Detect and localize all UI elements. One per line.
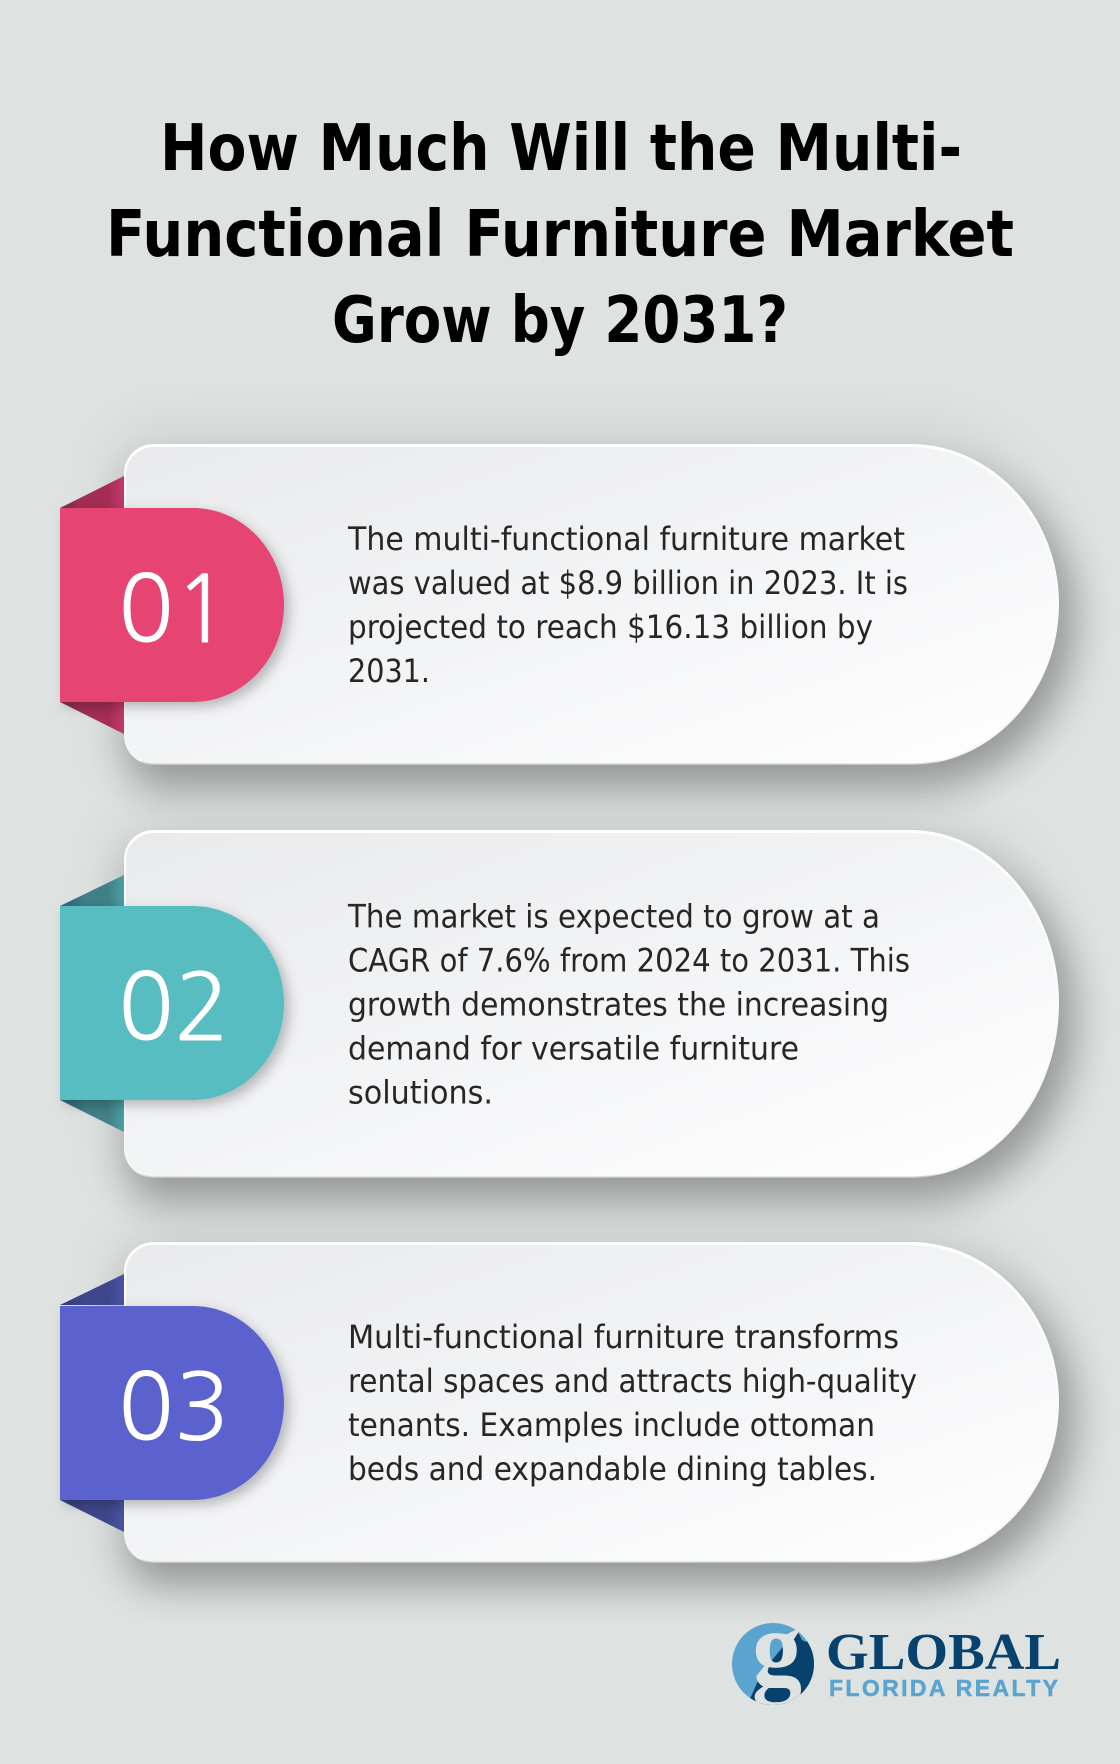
panel: card 01 [60, 430, 1074, 786]
card 03 text: rental spaces and attracts high-quality [348, 1362, 917, 1400]
title: Functional Furniture Market [106, 198, 1014, 272]
title: Grow by 2031? [332, 284, 788, 358]
card 01 text: was valued at $8.9 billion in 2023. It is [348, 564, 908, 602]
logo wordmark: GLOBAL [826, 1624, 1061, 1681]
card 02 text: demand for versatile furniture [348, 1030, 799, 1068]
card 01 text: 2031. [348, 652, 430, 690]
card 01 text: The multi-functional furniture market [347, 520, 905, 558]
card 02 text: CAGR of 7.6% from 2024 to 2031. This [348, 942, 910, 980]
panel: card 02 [60, 816, 1074, 1199]
card 02 text: growth demonstrates the increasing [348, 986, 889, 1024]
number 01: 01 [118, 563, 230, 656]
card 02 folds [60, 875, 124, 1132]
card 01 text: projected to reach $16.13 billion by [348, 608, 873, 646]
number 03: 03 [118, 1361, 230, 1454]
card 03 text: beds and expandable dining tables. [348, 1450, 877, 1488]
card 03 text [348, 1318, 917, 1488]
number 02: 02 [118, 961, 230, 1054]
card 03 text: tenants. Examples include ottoman [348, 1406, 875, 1444]
card 01 shadow [116, 430, 1074, 786]
title: How Much Will the Multi- [160, 112, 962, 186]
card 03 number badge [60, 1306, 284, 1500]
card 01 number badge [60, 508, 284, 702]
logo [732, 1623, 1059, 1705]
icon: logo circle: g [752, 1589, 802, 1708]
card 02 text: The market is expected to grow at a [347, 898, 880, 936]
card 03 folds [60, 1274, 124, 1532]
card 01 folds [60, 476, 124, 734]
panel: card 03 [60, 1228, 1074, 1584]
icon: logo circle [732, 1623, 814, 1705]
card 03 body [124, 1242, 1059, 1563]
card 02 text: solutions. [348, 1074, 493, 1112]
card 01 text [347, 520, 908, 690]
card 03 text: Multi-functional furniture transforms [348, 1318, 899, 1356]
card 03 shadow [116, 1228, 1074, 1584]
card 01 body [124, 444, 1059, 765]
card 02 text [347, 898, 910, 1112]
title [106, 112, 1014, 358]
card 02 shadow [116, 816, 1074, 1199]
logo tagline: FLORIDA REALTY [829, 1675, 1058, 1701]
card 02 number badge [60, 906, 284, 1100]
card 02 body [124, 830, 1059, 1178]
